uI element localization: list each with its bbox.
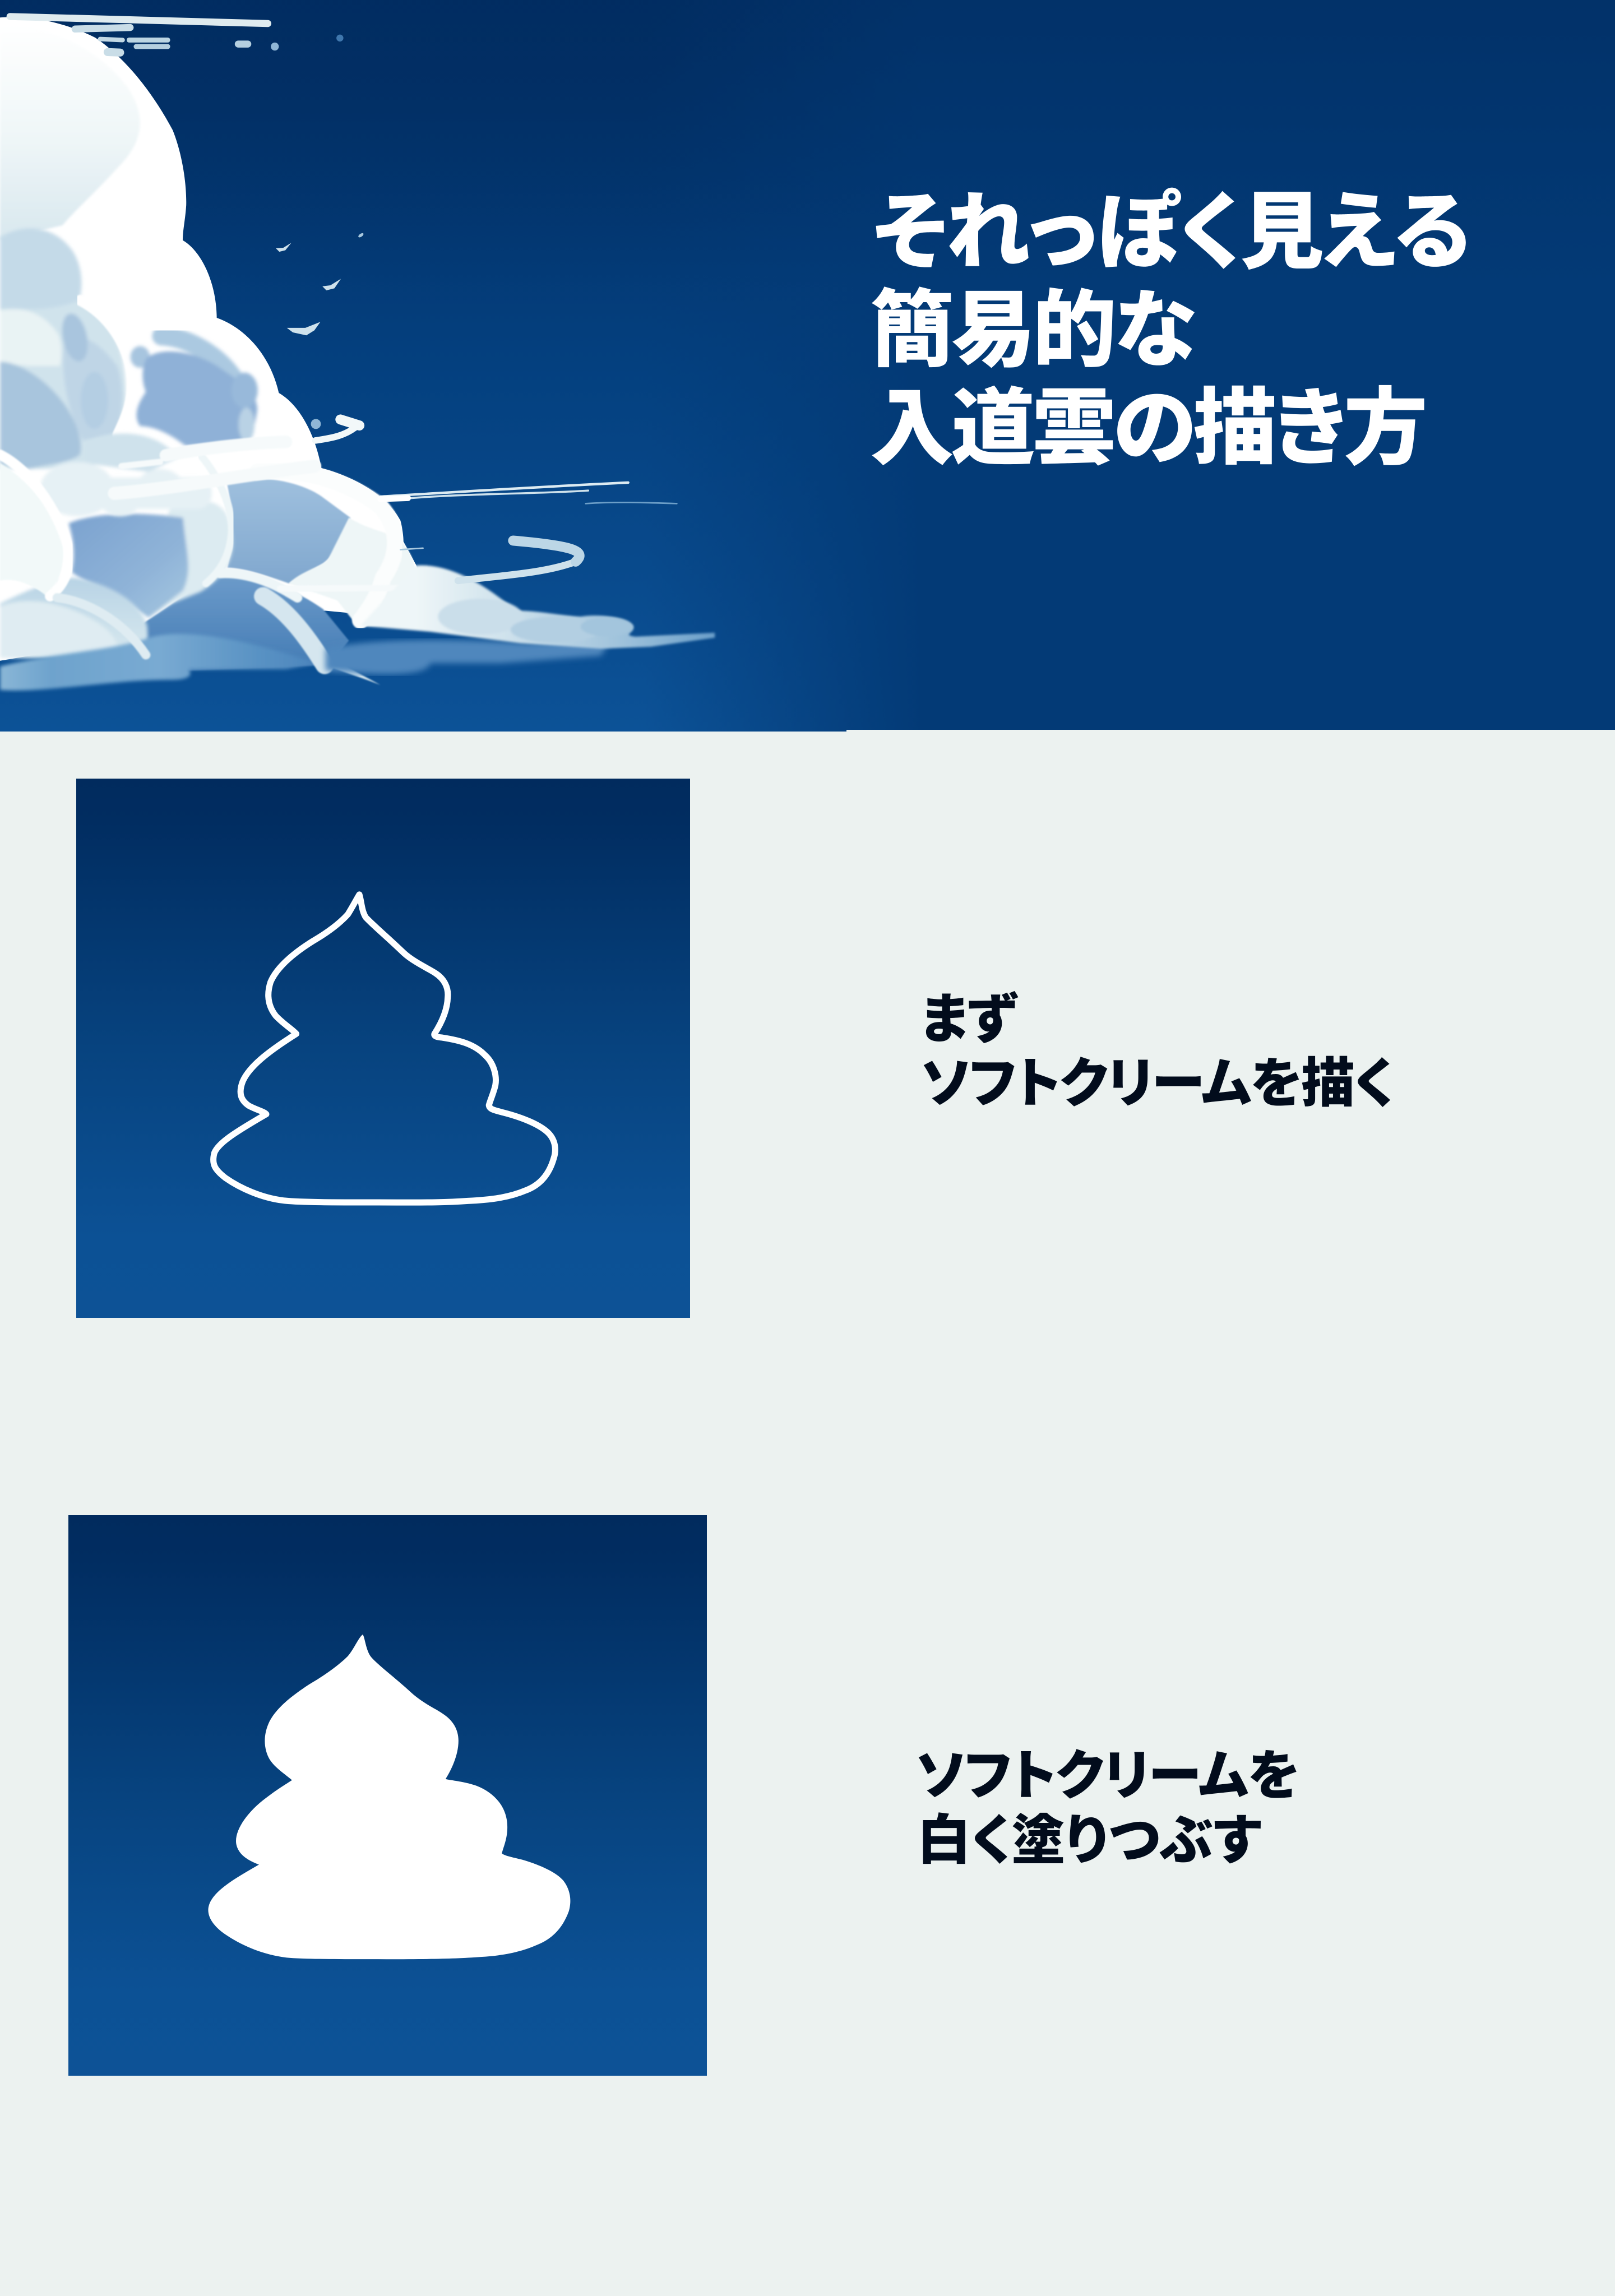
- streaks right: [316, 419, 677, 581]
- text: step 2 caption: 白く塗りつぶす: [917, 1811, 1261, 1871]
- lower right white arc: [257, 471, 395, 621]
- left white dome: [0, 464, 63, 598]
- tail and wisps: [10, 16, 715, 674]
- top streaks: [10, 16, 268, 53]
- upper cloud shading: [0, 81, 140, 239]
- title: 簡易的な: [870, 283, 1196, 377]
- mid band of puffs: [40, 433, 212, 516]
- lower centre shadow and ring: [68, 501, 233, 618]
- text: step 1 caption: [920, 989, 1394, 1114]
- panel: step 1 soft-serve outline: [76, 779, 690, 1318]
- tail puffs: [438, 599, 633, 643]
- bottom cloud bands: [0, 634, 317, 691]
- small lower arcs: [57, 573, 381, 685]
- title: それっぽく見える: [872, 185, 1471, 279]
- left pale mass: [0, 229, 126, 469]
- title: 入道雲の描き方: [870, 381, 1428, 475]
- text: step 2 caption: ソフトクリームを: [916, 1746, 1299, 1806]
- right lower shadow: [137, 478, 350, 670]
- icon: birds: [276, 232, 364, 335]
- title: [870, 185, 1471, 475]
- lower right dome: [289, 517, 446, 626]
- cloud tail: [325, 640, 610, 674]
- bottom left puffs: [0, 578, 149, 659]
- tail highlights: [360, 566, 715, 649]
- illustration: cumulonimbus cloud: [0, 16, 715, 691]
- header sky panel: [0, 0, 1615, 732]
- right inner shadow: [131, 336, 258, 446]
- white arc: upper left: [80, 300, 132, 435]
- text: step 2 caption: [916, 1746, 1299, 1871]
- text: step 1 caption: ソフトクリームを描く: [921, 1054, 1394, 1114]
- panel: step 2 filled soft-serve: [68, 1515, 707, 2076]
- text: step 1 caption: まず: [920, 989, 1019, 1049]
- cloud silhouette: [0, 17, 431, 661]
- white horizontal strokes: [114, 442, 415, 589]
- lower cloud layers: [0, 229, 446, 691]
- left white arc: [0, 455, 69, 596]
- lower centre white arc: [200, 455, 232, 584]
- icon: soft-serve outline: [214, 895, 555, 1202]
- icon: filled soft-serve: [208, 1635, 570, 1959]
